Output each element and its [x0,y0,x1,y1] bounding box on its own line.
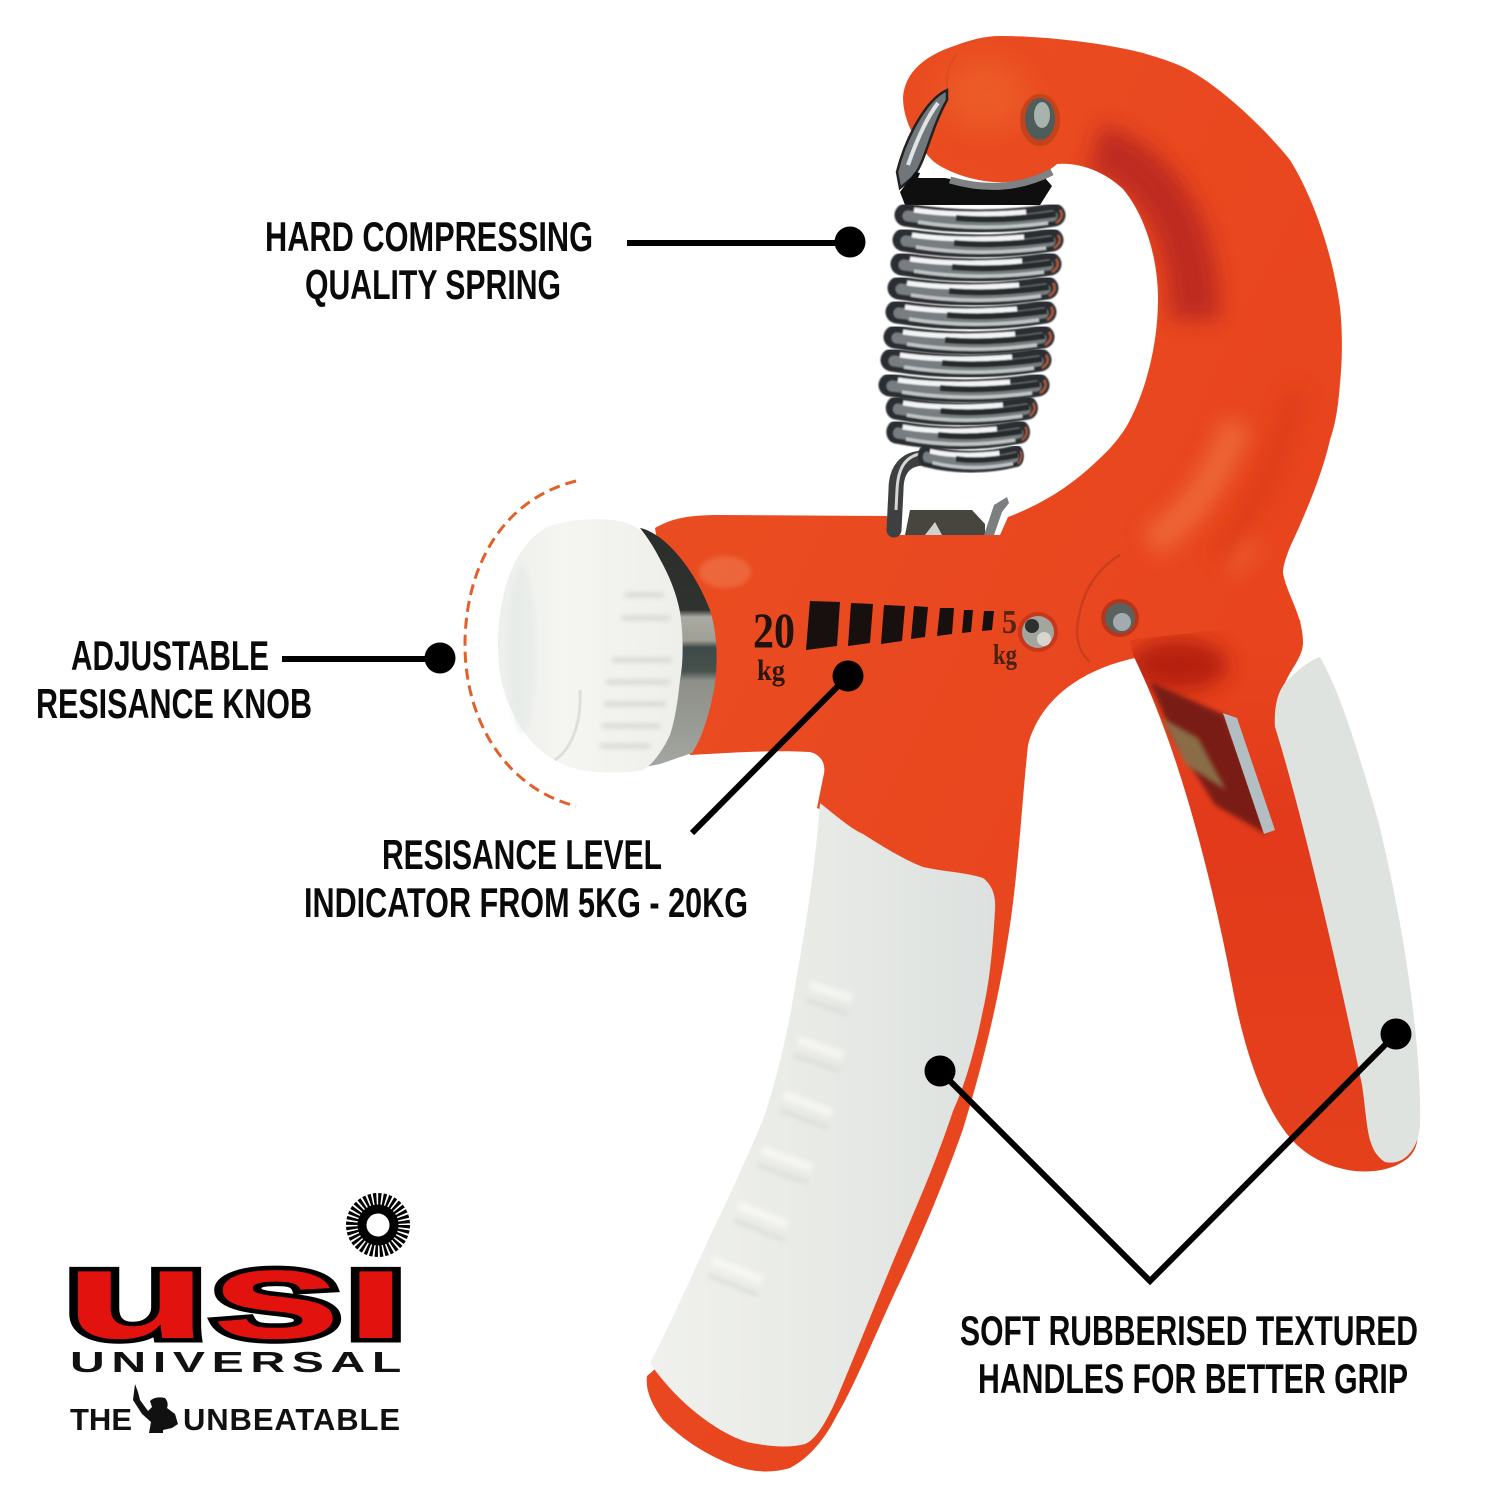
logo figure [133,1384,178,1433]
coil 8 [890,380,1046,397]
scale bars [806,601,994,650]
seat pin [984,497,1009,535]
level leader line [692,660,864,833]
metal collar [640,528,717,768]
pivot seam [1077,555,1120,662]
knob leader line [282,642,456,674]
coil 3 [902,259,1058,276]
resistance knob [498,519,683,773]
seat crescent [950,172,1052,186]
main body: arm, barrel and left handle [647,36,1342,1471]
seat gap [918,166,948,178]
resistance scale: kg [993,640,1017,671]
bottom hook [894,458,925,530]
right white grip [1275,657,1420,1163]
product: hand gripper [498,36,1420,1471]
logo tagline: UNBEATABLE [183,1402,404,1437]
resistance scale: kg [757,654,785,687]
knob left shade [508,565,536,735]
spring label [265,213,593,308]
top spring seat [900,172,1052,205]
level label: RESISANCE LEVEL [382,831,662,878]
barrel highlight [699,556,751,588]
logo name: UNIVERSAL [70,1347,408,1379]
right handle [1133,600,1420,1172]
coil 4 [899,283,1055,300]
spring leader line [627,226,866,258]
pivot screw right [1101,599,1139,637]
handles leader lines [924,1018,1412,1281]
grip texture [708,985,852,1295]
callout: handles [924,1018,1418,1402]
knob label: RESISANCE KNOB [36,680,312,727]
head screw [1020,94,1060,146]
callout: resistance level [304,660,864,926]
knob label [36,632,312,727]
coil 10 [896,427,1027,444]
level label [304,831,748,926]
arm shading [940,59,1297,573]
handle label plate [1150,682,1275,834]
hook highlight [896,453,925,510]
seat glint [925,522,942,535]
handles label [960,1307,1418,1402]
logo tagline: THE [70,1402,136,1437]
coil 11 [925,451,1022,468]
callout: knob [36,632,456,727]
logo tagline [70,1384,404,1437]
scale label 20 kg: 20 [753,602,795,658]
coil 9 [896,403,1035,420]
coil 6 [895,332,1051,349]
bottom spring seat [905,510,985,535]
coil 1 [906,210,1062,227]
spring label: HARD COMPRESSING [265,213,593,260]
logo wordmark: usı [63,1224,409,1365]
coil 7 [892,355,1048,372]
head ear crease [947,54,957,87]
dashed arc around knob [465,481,576,806]
left white grip [650,803,995,1446]
coil 2 [904,235,1060,252]
pivot screw left [1018,612,1058,652]
spring label: QUALITY SPRING [305,261,561,308]
top clip highlight [908,103,938,165]
resistance scale [753,601,1017,687]
logo sunburst [356,1203,400,1247]
coil 5 [897,307,1053,324]
knob ribs [600,595,672,746]
knob label: ADJUSTABLE [71,632,269,679]
logo: USI Universal [63,1203,409,1437]
knob inner ridge [555,690,580,760]
handle shadow [1128,639,1228,691]
spring [890,90,1062,535]
top clip [897,90,947,188]
level label: INDICATOR FROM 5KG - 20KG [304,879,748,926]
scale label 5 kg: 5 [1002,604,1017,641]
callout: spring [265,213,866,308]
